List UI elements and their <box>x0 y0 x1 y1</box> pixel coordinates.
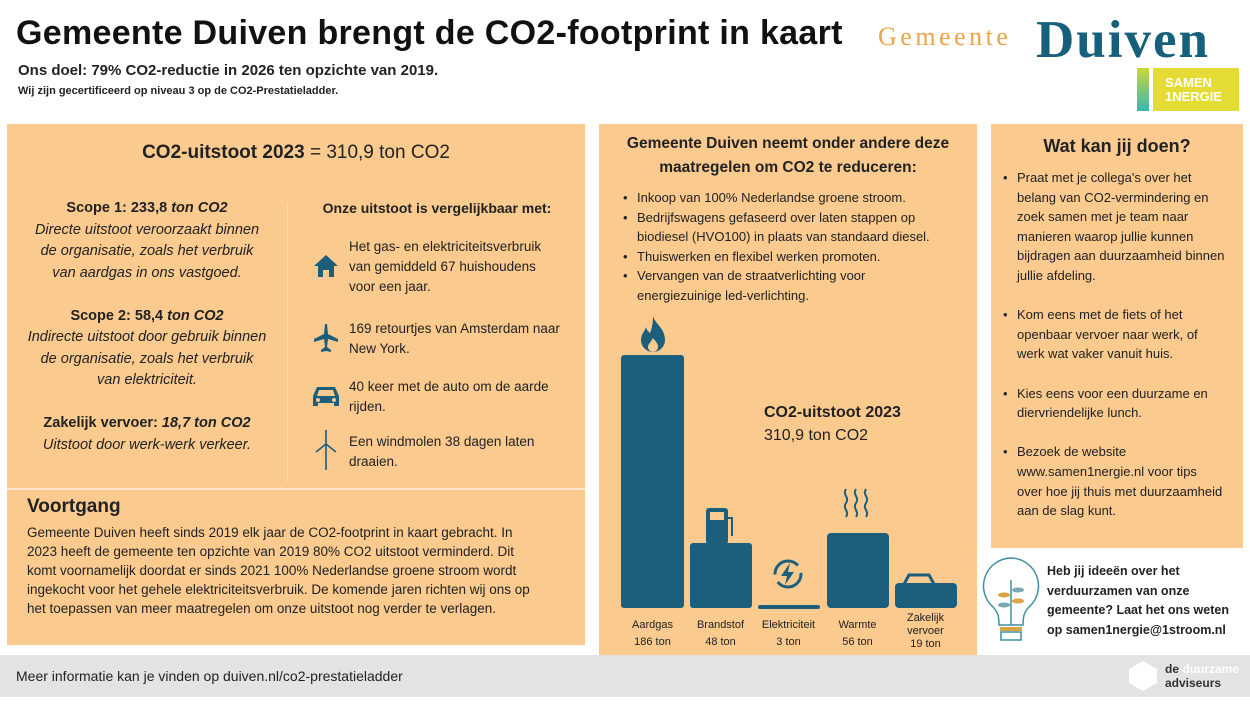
icon: plane <box>314 324 338 352</box>
scopes text block: Scope 2: 58,4 ton CO2 <box>70 308 224 324</box>
chart labels: Aardgas <box>632 619 673 631</box>
comparisons: Onze uitstoot is vergelijkbaar met: <box>323 200 551 216</box>
logo: samen1nergie: SAMEN <box>1165 75 1212 90</box>
bar chart <box>621 316 957 650</box>
bar chart: 3 ton <box>776 636 801 648</box>
icon: lightbulb with plant <box>982 557 1040 641</box>
comparisons: Een windmolen 38 dagen laten draaien. <box>349 434 534 469</box>
panel: wat kan jij doen <box>991 124 1243 548</box>
logo: Gemeente Duiven: Gemeente <box>878 22 1011 51</box>
comparisons: 169 retourtjes van Amsterdam naar New York. <box>349 321 560 356</box>
icon: fuel pump <box>706 508 733 543</box>
logo: samen1nergie: 1NERGIE <box>1165 89 1222 104</box>
chart labels <box>632 619 673 648</box>
bar chart: Elektriciteit <box>762 619 815 631</box>
callout: ideas: Heb jij ideeën over het verduurzamen van onze gemeente? Laat het ons weten op samen1nergie@1stroom.nl <box>1047 564 1229 636</box>
title: Gemeente Duiven brengt de CO2-footprint in kaart <box>16 14 843 52</box>
comparisons <box>313 200 560 470</box>
icon: house <box>314 255 338 277</box>
bar chart: 19 ton <box>910 638 941 650</box>
measures list <box>624 190 930 302</box>
bar chart: 56 ton <box>842 636 873 648</box>
icon: car roof <box>903 574 935 583</box>
certification note: Wij zijn gecertificeerd op niveau 3 op de CO2-Prestatieladder. <box>18 85 338 97</box>
bar chart: Zakelijk <box>907 612 944 624</box>
bar chart: vervoer <box>907 625 944 637</box>
tips list: Kies eens voor een duurzame en diervriendelijke lunch. <box>1017 386 1208 420</box>
scopes text block: Scope 1: 233,8 ton CO2 <box>66 200 228 216</box>
footer bar <box>0 655 1250 697</box>
voortgang section: Voortgang <box>27 496 121 517</box>
bar chart: Warmte <box>838 619 877 631</box>
scopes text block: Indirecte uitstoot door gebruik binnen de organisatie, zoals het verbruik van elektriciteit. <box>28 329 266 388</box>
heading: Gemeente Duiven neemt onder andere deze maatregelen om CO2 te reduceren: <box>627 135 949 176</box>
footer text: Meer informatie kan je vinden op duiven.nl/co2-prestatieladder <box>16 668 403 684</box>
icon: car <box>313 387 339 406</box>
logo: de duurzame adviseurs: de duurzame <box>1165 662 1239 676</box>
icon: lightning <box>774 560 802 588</box>
scopes text block: Zakelijk vervoer: 18,7 ton CO2 <box>43 415 251 431</box>
icon: heat waves <box>844 488 868 518</box>
tips list: Kom eens met de fiets of het openbaar vervoer naar werk, of werk wat vaker vanuit huis. <box>1017 307 1198 361</box>
chart callout total: CO2-uitstoot 2023 <box>764 404 901 421</box>
bar chart: Brandstof <box>697 619 744 631</box>
subtitle: Ons doel: 79% CO2-reductie in 2026 ten opzichte van 2019. <box>18 62 438 79</box>
comparisons: Het gas- en elektriciteitsverbruik van gemiddeld 67 huishoudens voor een jaar. <box>349 239 541 294</box>
tips list: Praat met je collega's over het belang van CO2-vermindering en zoek samen met je team naar manieren waarop jullie kunnen bijdragen aan duurzaamheid binnen jullie afdeling. <box>1017 170 1224 283</box>
tips list: Bezoek de website www.samen1nergie.nl voor tips over hoe jij thuis met duurzaamheid aan de slag kunt. <box>1017 444 1222 518</box>
measures list: Bedrijfswagens gefaseerd over laten stappen op biodiesel (HVO100) in plaats van standaard diesel. <box>637 210 930 244</box>
chart callout total: 310,9 ton CO2 <box>764 427 868 444</box>
heading: Wat kan jij doen? <box>1043 136 1191 156</box>
logo: samen1nergie <box>1137 68 1239 111</box>
scopes text block: Uitstoot door werk-werk verkeer. <box>43 436 251 452</box>
voortgang section: Gemeente Duiven heeft sinds 2019 elk jaar de CO2-footprint in kaart gebracht. In 2023 heeft de gemeente ten opzichte van 2019 80% CO2 uitstoot verminderd. Dit komt voornamelijk doordat er sinds 2021 100% Nederlandse groene stroom wordt ingekocht voor het gehele elektriciteitsverbruik. De komende jaren richten wij ons op het toepassen van meer maatregelen om onze uitstoot nog verder te verlagen. <box>27 525 530 616</box>
heading: CO2-uitstoot 2023 = 310,9 ton CO2 <box>142 142 450 163</box>
measures list: Thuiswerken en flexibel werken promoten. <box>637 248 881 264</box>
comparisons: 40 keer met de auto om de aarde rijden. <box>349 379 549 414</box>
measures list: Vervangen van de straatverlichting voor energiezuinige led-verlichting. <box>637 268 865 302</box>
tips list <box>1004 170 1224 518</box>
logo: Gemeente Duiven: Duiven <box>1036 11 1210 69</box>
bar chart: 48 ton <box>705 636 736 648</box>
logo: de duurzame adviseurs: adviseurs <box>1165 676 1221 690</box>
panel: CO2 uitstoot overview <box>7 124 585 645</box>
scopes text block <box>28 200 266 452</box>
scopes text block: Directe uitstoot veroorzaakt binnen de organisatie, zoals het verbruik van aardgas in ons vastgoed. <box>35 222 259 280</box>
chart labels: 186 ton <box>634 636 671 648</box>
measures list: Inkoop van 100% Nederlandse groene stroom. <box>637 190 906 205</box>
logo: Gemeente Duiven <box>878 11 1210 69</box>
logo: de duurzame adviseurs <box>1129 661 1239 691</box>
icon: windmill <box>316 430 336 470</box>
panel: maatregelen + chart <box>599 124 977 655</box>
icon: flame <box>641 316 665 352</box>
chart callout total <box>764 404 901 444</box>
